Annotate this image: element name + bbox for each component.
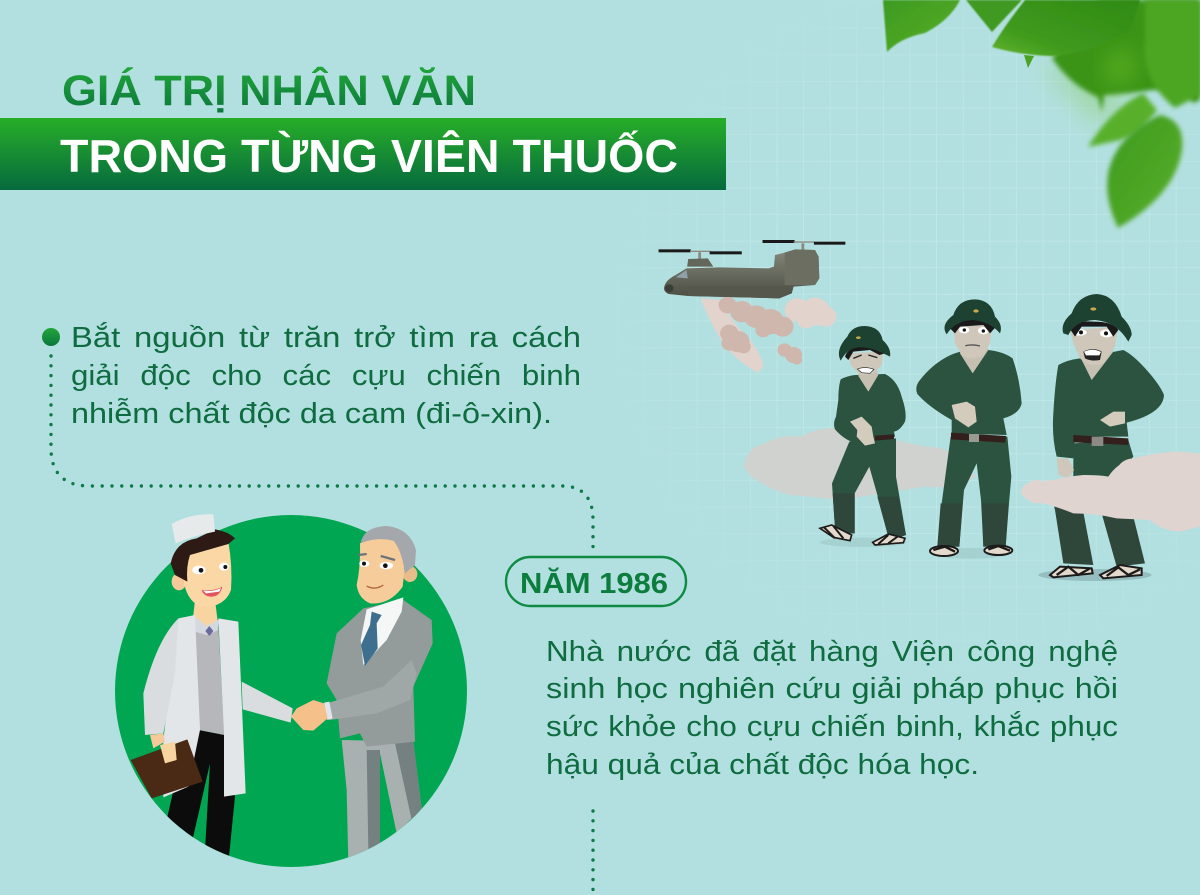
text block: origin: Bắt nguồn từ trăn trở tìm ra cách xyxy=(71,322,581,354)
soldier 2 xyxy=(916,299,1022,559)
text block: 1986: hậu quả của chất độc hóa học. xyxy=(546,749,979,781)
soldier 3 xyxy=(1038,294,1164,581)
text block: 1986 xyxy=(546,636,1118,781)
front smoke cloud xyxy=(1021,452,1200,532)
text block: 1986: sức khỏe cho cựu chiến binh, khắc phục xyxy=(546,711,1118,743)
green circle xyxy=(115,515,467,867)
timeline dotted connector lower xyxy=(591,811,595,895)
text block: 1986: Nhà nước đã đặt hàng Viện công nghệ xyxy=(546,636,1118,668)
text block: origin xyxy=(71,322,581,430)
title line 1: GIÁ TRỊ NHÂN VĂN xyxy=(62,66,476,115)
text block: origin: nhiễm chất độc da cam (đi-ô-xin). xyxy=(71,398,552,430)
timeline dotted connector xyxy=(42,328,593,548)
title bar: TRONG TỪNG VIÊN THUỐC xyxy=(60,130,678,182)
illustration: doctor and veteran handshake xyxy=(115,514,467,867)
illustration: war scene xyxy=(659,240,1200,581)
soldier 1 xyxy=(820,326,907,547)
text block: origin: giải độc cho các cựu chiến binh xyxy=(71,360,581,392)
doctor xyxy=(131,514,293,863)
leaves decoration xyxy=(883,0,1200,228)
title bar xyxy=(0,118,726,190)
veteran xyxy=(324,526,433,863)
badge: year 1986 xyxy=(506,557,686,606)
helicopter and smoke xyxy=(659,240,976,500)
badge: year 1986: NĂM 1986 xyxy=(520,567,668,600)
text block: 1986: sinh học nghiên cứu giải pháp phục hồi xyxy=(546,673,1118,705)
handshake xyxy=(291,700,328,731)
